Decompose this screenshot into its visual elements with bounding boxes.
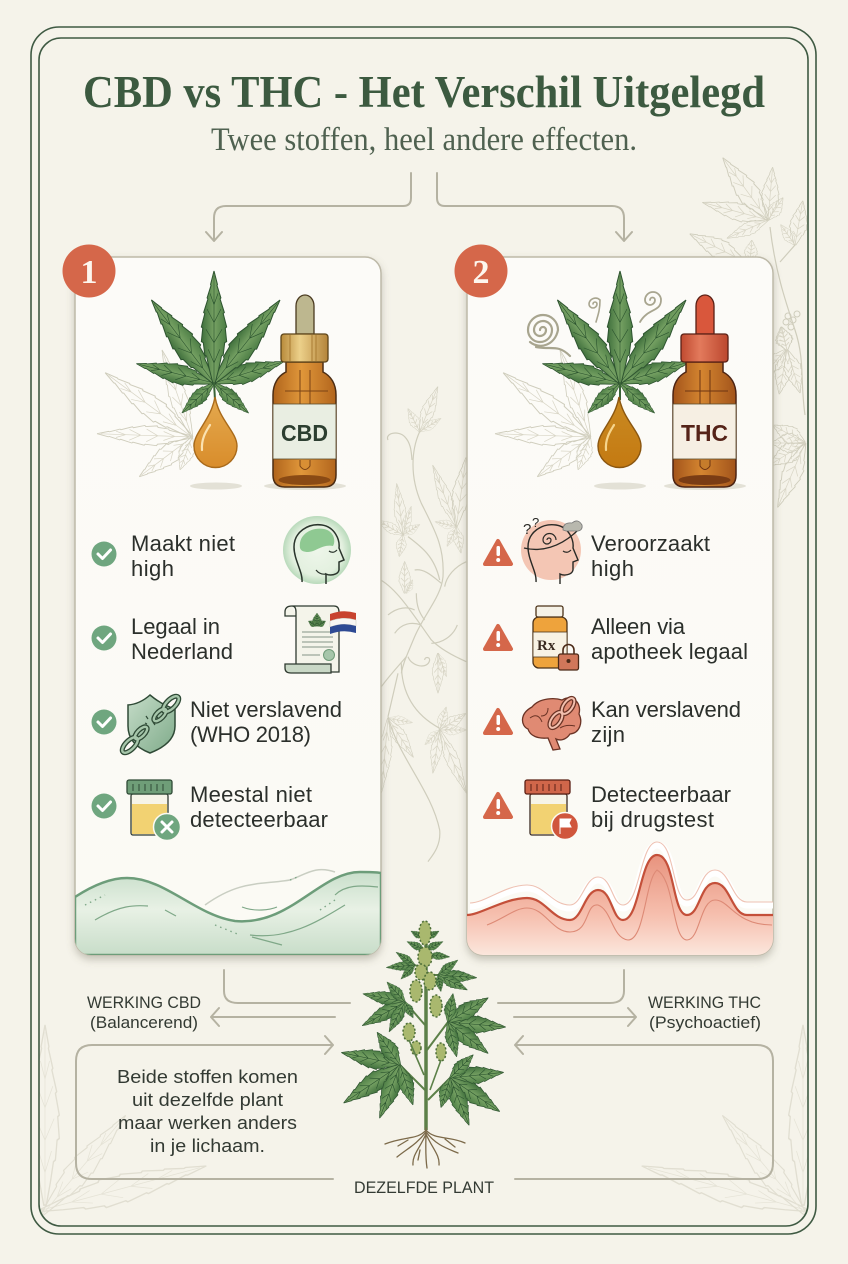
subtitle: Twee stoffen, heel andere effecten. xyxy=(211,122,637,158)
badge: 1 xyxy=(62,244,116,298)
item: veroorzaakt high: Veroorzaakt xyxy=(591,531,710,556)
item: legaal in Nederland: Legaal in xyxy=(131,614,220,639)
item: veroorzaakt high: high xyxy=(591,556,634,581)
item: veroorzaakt high: ? xyxy=(532,515,539,530)
item: alleen via apotheek legaal xyxy=(485,606,748,670)
illustration: CBD leaf, drop and bottle: CBD xyxy=(281,420,328,446)
title: CBD vs THC - Het Verschil Uitgelegd xyxy=(83,67,765,117)
arrow: title to card 2 xyxy=(437,173,632,241)
label: werking THC xyxy=(648,993,761,1032)
connector: THC card to plant xyxy=(498,970,624,1003)
item: maakt niet high: Maakt niet xyxy=(131,531,235,556)
label: werking THC: WERKING THC xyxy=(648,993,761,1012)
item: kan verslavend zijn: zijn xyxy=(591,722,625,747)
label: werking THC: (Psychoactief) xyxy=(649,1013,761,1032)
item: legaal in Nederland: Nederland xyxy=(131,639,233,664)
item: veroorzaakt high: ? xyxy=(523,521,531,538)
illustration: cannabis plant xyxy=(338,921,507,1168)
decorative background botanicals xyxy=(31,151,817,1224)
item: meestal niet detecteerbaar: Meestal niet xyxy=(190,782,312,807)
badge: 1: 1 xyxy=(80,254,98,291)
item: maakt niet high: high xyxy=(131,556,174,581)
item: alleen via apotheek legaal: Rx xyxy=(537,638,556,654)
item: alleen via apotheek legaal: Alleen via xyxy=(591,614,686,639)
item: legaal in Nederland xyxy=(92,606,356,673)
item: alleen via apotheek legaal: apotheek legaal xyxy=(591,639,748,664)
label: werking CBD: (Balancerend) xyxy=(90,1013,198,1032)
badge: 2: 2 xyxy=(472,254,490,291)
item: niet verslavend: Niet verslavend xyxy=(190,697,342,722)
item: niet verslavend xyxy=(92,694,342,755)
item: detecteerbaar bij drugstest: bij drugstest xyxy=(591,807,714,832)
label: werking CBD xyxy=(87,993,201,1032)
item: kan verslavend zijn: Kan verslavend xyxy=(591,697,741,722)
item: detecteerbaar bij drugstest xyxy=(485,780,731,840)
item: veroorzaakt high xyxy=(485,515,710,584)
panel: left outline with arrow to plant xyxy=(76,1036,333,1179)
label: werking CBD: WERKING CBD xyxy=(87,993,201,1012)
item: meestal niet detecteerbaar: detecteerbaar xyxy=(190,807,328,832)
text: beide stoffen xyxy=(117,1066,298,1156)
arrow: title to card 1 xyxy=(206,173,411,241)
wave: psychoactive red xyxy=(467,842,773,955)
arrow: plant to werking CBD xyxy=(211,1008,335,1026)
item: niet verslavend: (WHO 2018) xyxy=(190,722,311,747)
panel: THC xyxy=(454,244,773,955)
arrow: plant to werking THC xyxy=(514,1008,636,1026)
item: meestal niet detecteerbaar xyxy=(92,780,328,840)
illustration: CBD leaf, drop and bottle xyxy=(97,271,346,490)
illustration: THC leaf, drop, smoke and bottle xyxy=(495,271,746,490)
badge: 2 xyxy=(454,244,508,298)
panel: CBD xyxy=(62,244,381,955)
text: beide stoffen: maar werken anders xyxy=(118,1112,297,1133)
label: dezelfde plant: DEZELFDE PLANT xyxy=(354,1178,494,1197)
text: beide stoffen: in je lichaam. xyxy=(150,1135,265,1156)
text: beide stoffen: uit dezelfde plant xyxy=(132,1089,283,1110)
text: beide stoffen: Beide stoffen komen xyxy=(117,1066,298,1087)
item: kan verslavend zijn xyxy=(485,696,741,750)
item: detecteerbaar bij drugstest: Detecteerbaar xyxy=(591,782,731,807)
wave: balanced green xyxy=(75,870,381,955)
connector: CBD card to plant xyxy=(224,970,350,1003)
item: maakt niet high xyxy=(92,516,351,584)
illustration: THC leaf, drop, smoke and bottle: THC xyxy=(681,420,728,446)
panel: right outline with arrow to plant xyxy=(515,1036,773,1179)
